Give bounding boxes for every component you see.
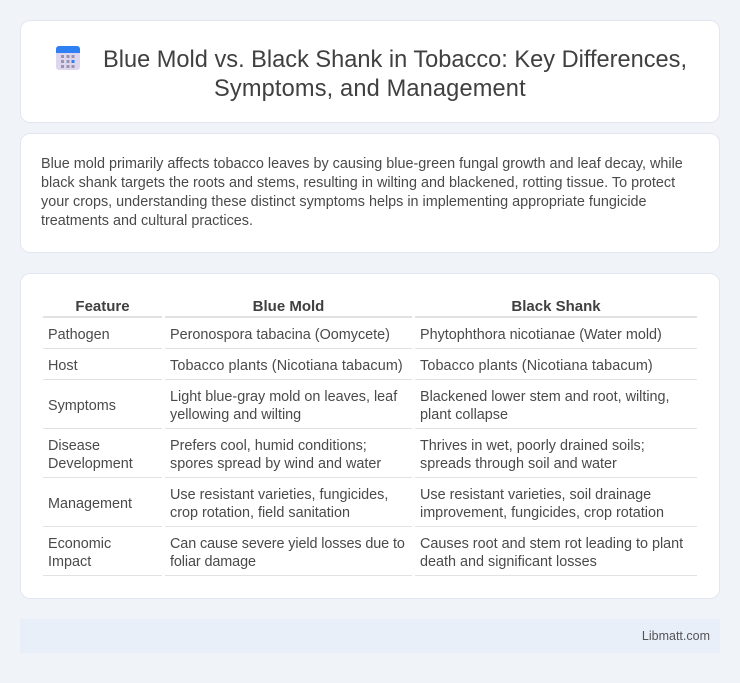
row: disease development: spreads through soil and water [420,456,617,472]
intro text [41,156,683,229]
row: disease development: Development [48,456,133,472]
row: economic impact: foliar damage [170,554,256,570]
footer bar [20,619,720,653]
row: host: Tobacco plants (Nicotiana tabacum) [420,358,653,374]
row: economic impact: death and significant losses [420,554,597,570]
table header [75,298,601,315]
row: management: Use resistant varieties, soil drainage [420,487,651,503]
row: pathogen: Pathogen [48,327,110,343]
row: disease development: spores spread by wind and water [170,456,381,472]
title: Blue Mold vs. Black Shank in Tobacco: Key Differences, [103,47,687,73]
row: symptoms: Blackened lower stem and root, wilting, [420,389,670,405]
row: economic impact: Economic [48,536,111,552]
row: economic impact: Can cause severe yield losses due to [170,536,405,552]
row: disease development: Prefers cool, humid conditions; [170,438,367,454]
footer text: Libmatt.com [642,629,710,643]
panel: title card [20,20,720,123]
row: management: crop rotation, field sanitation [170,505,350,521]
row: symptoms: yellowing and wilting [170,407,301,423]
row: management: improvement, fungicides, crop rotation [420,505,664,521]
table header: Black Shank [511,298,601,315]
panel: comparison table card [20,273,720,599]
table header: Feature [75,298,130,315]
row: economic impact: Impact [48,554,91,570]
row: disease development [48,438,645,472]
icon: calendar [56,46,80,70]
row: pathogen: Peronospora tabacina (Oomycete) [170,327,390,343]
row: disease development: Thrives in wet, poorly drained soils; [420,438,645,454]
row: symptoms: Symptoms [48,398,116,414]
row: economic impact [48,536,684,570]
intro text: Blue mold primarily affects tobacco leaves by causing blue-green fungal growth and leaf decay, while [41,156,683,172]
row: management [48,487,664,521]
row: symptoms: Light blue-gray mold on leaves, leaf [170,389,397,405]
row: host: Tobacco plants (Nicotiana tabacum) [170,358,403,374]
row: management: Management [48,496,132,512]
title [103,47,687,102]
row: host [48,358,653,374]
row: pathogen: Phytophthora nicotianae (Water mold) [420,327,662,343]
row: symptoms [48,389,670,423]
row: disease development: Disease [48,438,100,454]
panel: intro card [20,133,720,253]
row: management: Use resistant varieties, fungicides, [170,487,388,503]
table header: Blue Mold [253,298,324,315]
intro text: black shank targets the roots and stems, resulting in wilting and blackened, rotting tissue. To protect [41,175,675,191]
intro text: your crops, understanding these distinct symptoms helps in implementing appropriate fungicide [41,194,647,210]
intro text: treatments and cultural practices. [41,213,253,229]
row: host: Host [48,358,78,374]
row: pathogen [48,327,662,343]
row: economic impact: Causes root and stem rot leading to plant [420,536,683,552]
title: Symptoms, and Management [214,76,526,102]
row: symptoms: plant collapse [420,407,508,423]
comparison table [43,298,697,576]
